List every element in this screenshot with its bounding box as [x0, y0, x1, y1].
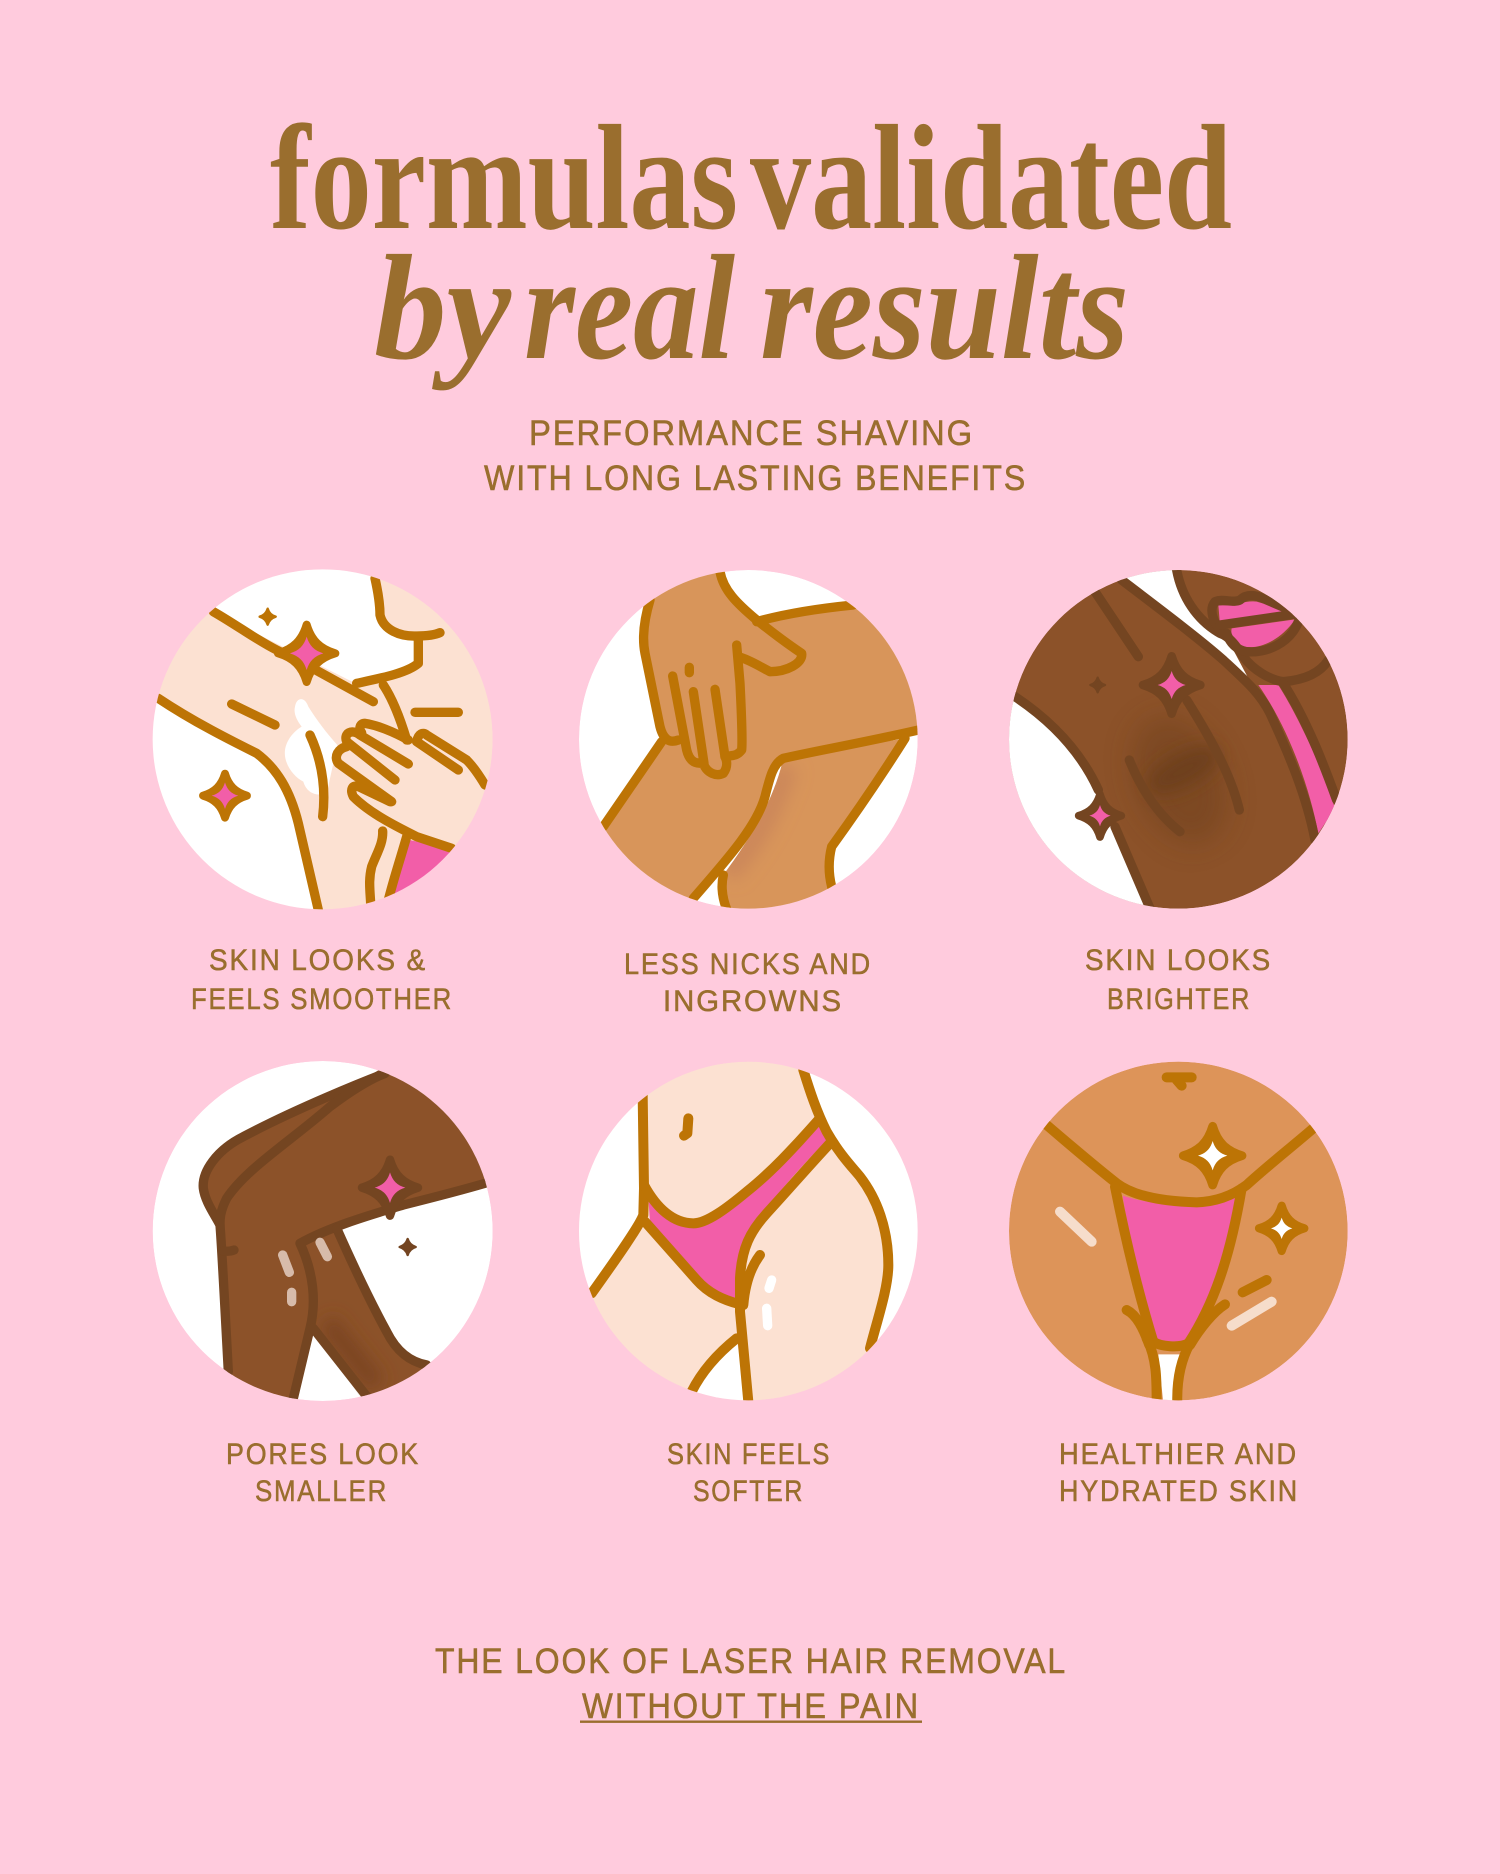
panel: skin looks and feels smoother [150, 563, 493, 1016]
icon: hip and pink bikini [577, 1062, 920, 1405]
subtitle: WITH LONG LASTING BENEFITS [484, 459, 1027, 498]
footer text [435, 1642, 1067, 1726]
panel: skin looks brighter [1007, 563, 1348, 1016]
label: INGROWNS [663, 985, 843, 1018]
title: real [524, 225, 735, 391]
title [270, 95, 1232, 391]
label [667, 1438, 831, 1508]
footer text: WITHOUT THE PAIN [582, 1687, 920, 1726]
icon: hand on knee [579, 563, 927, 917]
icon: hand applying cream to leg [150, 563, 493, 910]
label: SKIN FEELS [667, 1438, 831, 1471]
label: HEALTHIER AND [1059, 1438, 1298, 1471]
title: results [760, 225, 1129, 391]
label: BRIGHTER [1107, 983, 1251, 1016]
label: SOFTER [693, 1475, 804, 1508]
icon: bent knee [153, 1061, 497, 1405]
footer text: THE LOOK OF LASER HAIR REMOVAL [435, 1642, 1067, 1681]
label: SKIN LOOKS & [209, 944, 427, 977]
title: by [374, 225, 512, 391]
label [226, 1438, 420, 1508]
label: FEELS SMOOTHER [191, 983, 453, 1016]
panel: less nicks and ingrowns [579, 563, 927, 1018]
label: SMALLER [255, 1475, 388, 1508]
title: formulas [270, 95, 738, 261]
panel: healthier and hydrated skin [1009, 1062, 1348, 1508]
label [191, 944, 453, 1016]
label: HYDRATED SKIN [1059, 1475, 1299, 1508]
panel: skin feels softer [577, 1062, 920, 1508]
label: LESS NICKS AND [624, 948, 872, 981]
title: validated [750, 95, 1232, 261]
subtitle: PERFORMANCE SHAVING [529, 414, 974, 453]
label [1059, 1438, 1299, 1508]
label [624, 948, 872, 1018]
label [1085, 944, 1272, 1016]
label: PORES LOOK [226, 1438, 420, 1471]
label: SKIN LOOKS [1085, 944, 1272, 977]
icon: bikini front view [1009, 1062, 1348, 1403]
panel: pores look smaller [153, 1061, 497, 1508]
icon: underarm with lips [1007, 563, 1348, 910]
subtitle [484, 414, 1027, 498]
